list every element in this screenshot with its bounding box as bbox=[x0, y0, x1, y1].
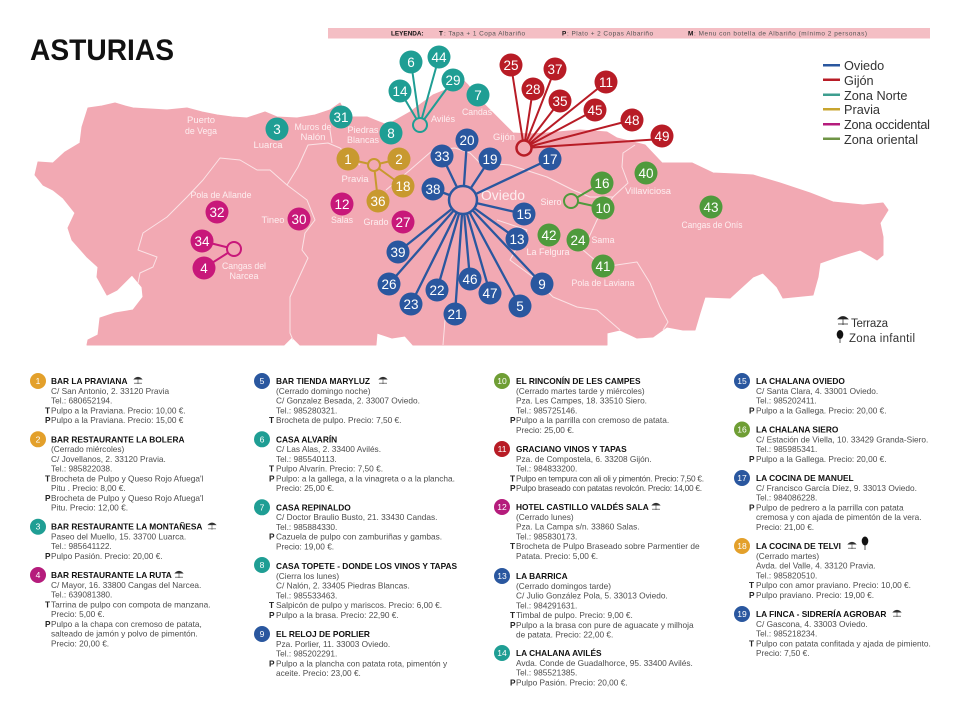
markers: Gijón bbox=[500, 54, 674, 156]
entry 2: (Cerrado miércoles) bbox=[51, 444, 125, 454]
place labels: Pravia bbox=[342, 174, 369, 185]
entry 8: Pulpo a la brasa. Precio: 22,90 €. bbox=[276, 610, 399, 620]
entry 1: BAR LA PRAVIANA bbox=[51, 376, 127, 386]
markers: Zona occidental bbox=[190, 192, 414, 280]
markers: Pravia: 36 bbox=[370, 194, 386, 209]
place labels: Nalón bbox=[300, 132, 326, 143]
place labels: Puerto bbox=[187, 115, 215, 126]
legend band: : Plato + 2 Copas Albariño bbox=[567, 31, 653, 38]
markers: Oviedo: 17 bbox=[542, 152, 558, 167]
zone legend: Gijón bbox=[844, 74, 874, 88]
entry 9: 9 bbox=[260, 629, 265, 639]
entry 13: T bbox=[510, 610, 515, 620]
entry 16: P bbox=[749, 454, 755, 464]
legend band: : Menu con botella de Albariño (mínimo 2 personas) bbox=[694, 31, 867, 38]
place labels: Narcea bbox=[230, 271, 259, 282]
entry 9: P bbox=[269, 658, 275, 668]
place labels bbox=[185, 107, 743, 289]
entry 17: Pulpo de pedrero a la parrilla con patata bbox=[756, 502, 904, 512]
entry 12: 12 bbox=[497, 502, 507, 512]
entry 16: LA CHALANA SIERO bbox=[756, 424, 839, 434]
zone legend: Pravia bbox=[844, 103, 881, 117]
entry 2: Brocheta de Pulpo y Queso Rojo Afuega'l bbox=[51, 473, 204, 483]
entry 10: EL RINCONÍN DE LES CAMPES bbox=[516, 375, 641, 386]
entry 18: T bbox=[749, 580, 754, 590]
entry 10: Pulpo a la parrilla con cremoso de patata. bbox=[516, 415, 669, 425]
entry 1: Pulpo a la Praviana. Precio: 15,00 € bbox=[51, 415, 184, 425]
entry 4: C/ Mayor, 16. 33800 Cangas del Narcea. bbox=[51, 580, 201, 590]
entry 8: Salpicón de pulpo y mariscos. Precio: 6,00 €. bbox=[276, 600, 442, 610]
legend band bbox=[328, 28, 930, 38]
entry 3: Paseo del Muello, 15. 33700 Luarca. bbox=[51, 532, 186, 542]
entry 15 bbox=[734, 373, 887, 415]
entry 18: Avda. del Valle, 4. 33120 Pravia. bbox=[756, 560, 876, 570]
entry 14: LA CHALANA AVILÉS bbox=[516, 647, 602, 658]
markers: Oviedo: 22 bbox=[429, 283, 445, 298]
entry 1: C/ San Antonio, 2. 33120 Pravia bbox=[51, 386, 169, 396]
entry 1 bbox=[30, 373, 186, 425]
entry 7 bbox=[254, 499, 442, 551]
entry 12: Patata. Precio: 5,00 €. bbox=[516, 551, 598, 561]
entry 10 bbox=[494, 373, 669, 435]
icon legend: Zona infantil bbox=[849, 333, 915, 345]
entry 3 bbox=[30, 519, 216, 561]
entry 2: Brocheta de Pulpo y Queso Rojo Afuega'l bbox=[51, 493, 204, 503]
entry 18: LA COCINA DE TELVI bbox=[756, 541, 841, 551]
markers: Oviedo: 15 bbox=[516, 207, 532, 222]
entry 9 bbox=[254, 626, 448, 678]
entry 19: T bbox=[749, 638, 754, 648]
place labels: Salas bbox=[331, 215, 353, 226]
entry 6: T bbox=[269, 464, 274, 474]
entry 11: Pulpo braseado con patatas revolcón. Precio: 14,00 €. bbox=[516, 483, 702, 493]
entry 12: HOTEL CASTILLO VALDÉS SALA bbox=[516, 501, 649, 512]
markers: Gijón: 11 bbox=[599, 75, 613, 90]
entry 12: Tel.: 985830173. bbox=[516, 531, 577, 541]
entry 4: Precio: 5,00 €. bbox=[51, 609, 105, 619]
entry 11: GRACIANO VINOS Y TAPAS bbox=[516, 444, 627, 454]
entry 17: Tel.: 984086228. bbox=[756, 492, 817, 502]
entry 17: P bbox=[749, 502, 755, 512]
legend band: M bbox=[688, 31, 693, 38]
map of Asturias bbox=[35, 80, 888, 345]
entry 9: Pza. Porlier, 11. 33003 Oviedo. bbox=[276, 639, 390, 649]
entry 13: 13 bbox=[497, 571, 507, 581]
entry 10: Pza. Les Campes, 18. 33510 Siero. bbox=[516, 396, 647, 406]
entry 2: Pitu . Precio: 8,00 €. bbox=[51, 483, 126, 493]
markers: Oviedo: 20 bbox=[459, 133, 475, 148]
entry 11: Pza. de Compostela, 6. 33208 Gijón. bbox=[516, 454, 652, 464]
markers: Zona occidental: 30 bbox=[291, 212, 307, 227]
entry 1: T bbox=[45, 405, 50, 415]
entry 8: C/ Nalón, 2. 33405 Piedras Blancas. bbox=[276, 580, 410, 590]
markers: Pravia bbox=[336, 148, 414, 212]
entry 8: Tel.: 985533463. bbox=[276, 590, 337, 600]
entry 14: Avda. Conde de Guadalhorce, 95. 33400 Avilés. bbox=[516, 658, 693, 668]
entry 11: Pulpo en tempura con ali oli y pimentón. Precio: 7,50 €. bbox=[516, 473, 704, 483]
entry 15: P bbox=[749, 405, 755, 415]
place labels: Sama bbox=[592, 235, 615, 246]
entry 14 bbox=[494, 645, 693, 687]
entry 18: Pulpo con amor praviano. Precio: 10,00 €. bbox=[756, 580, 911, 590]
entry 2: T bbox=[45, 473, 50, 483]
entry 3: Tel.: 985641122. bbox=[51, 541, 112, 551]
markers: Oviedo: 5 bbox=[516, 299, 524, 314]
entry 15: Pulpo a la Gallega. Precio: 20,00 €. bbox=[756, 405, 887, 415]
entry 11: 11 bbox=[498, 444, 507, 454]
entry 16 bbox=[734, 422, 928, 464]
entry 16: Tel.: 985985341. bbox=[756, 444, 817, 454]
entry 10: Precio: 25,00 €. bbox=[516, 425, 574, 435]
place labels: Pola de Laviana bbox=[572, 278, 635, 289]
markers: Oviedo: 47 bbox=[482, 286, 498, 301]
place labels: Siero bbox=[540, 197, 562, 208]
markers: Gijón: 25 bbox=[503, 58, 519, 73]
entry 5: T bbox=[269, 415, 274, 425]
markers: Zona Norte bbox=[266, 46, 490, 144]
entry 3: P bbox=[45, 551, 51, 561]
markers: Zona oriental: 40 bbox=[638, 166, 654, 181]
entry 8: T bbox=[269, 600, 274, 610]
entry 8 bbox=[254, 557, 458, 620]
entry 15: C/ Santa Clara, 4. 33001 Oviedo. bbox=[756, 386, 878, 396]
markers: Zona oriental: 43 bbox=[703, 200, 719, 215]
entry 19: Precio: 7,50 €. bbox=[756, 648, 810, 658]
markers: Pravia: 1 bbox=[344, 152, 352, 167]
place labels: Gijón bbox=[493, 132, 515, 143]
entry 1: 1 bbox=[36, 376, 41, 386]
entry 12: T bbox=[510, 541, 515, 551]
markers: Oviedo: 39 bbox=[390, 245, 406, 260]
entry 9: Tel.: 985202291. bbox=[276, 648, 337, 658]
entry 9: aceite. Precio: 23,00 €. bbox=[276, 668, 361, 678]
icon legend: Terraza bbox=[851, 318, 889, 330]
entry 11: Tel.: 984833200. bbox=[516, 464, 577, 474]
entry 14: Pulpo Pasión. Precio: 20,00 €. bbox=[516, 677, 628, 687]
entry 1: Tel.: 680652194. bbox=[51, 396, 112, 406]
markers: Zona Norte: 31 bbox=[333, 110, 349, 125]
place labels: Cangas del bbox=[222, 261, 266, 272]
markers: Zona oriental: 41 bbox=[595, 259, 611, 274]
entry 17 bbox=[734, 470, 922, 532]
entry 4: Pulpo a la chapa con cremoso de patata, bbox=[51, 619, 202, 629]
entry 10: Tel.: 985725146. bbox=[516, 405, 577, 415]
place labels: Luarca bbox=[254, 140, 283, 151]
entry 19: 19 bbox=[737, 609, 747, 619]
entry 18: 18 bbox=[737, 541, 747, 551]
place labels: Avilés bbox=[431, 114, 455, 125]
markers: Gijón: 48 bbox=[624, 113, 640, 128]
entry 14: P bbox=[510, 677, 516, 687]
entry 13: P bbox=[510, 620, 516, 630]
entry 11: T bbox=[510, 473, 515, 483]
entry 5: 5 bbox=[260, 376, 265, 386]
entry 19: C/ Gascona, 4. 33003 Oviedo. bbox=[756, 619, 868, 629]
markers: Oviedo: 38 bbox=[425, 182, 441, 197]
entry 4: T bbox=[45, 599, 50, 609]
entry 5 bbox=[254, 373, 420, 425]
markers: Zona oriental bbox=[538, 162, 722, 278]
place labels: Muros de bbox=[294, 122, 332, 133]
entry 17: C/ Francisco García Díez, 9. 33013 Oviedo. bbox=[756, 483, 917, 493]
entry 13 bbox=[494, 568, 694, 640]
place labels: Tineo bbox=[262, 215, 284, 226]
entry 9: Pulpo a la plancha con patata rota, pimentón y bbox=[276, 658, 448, 668]
markers: Zona Norte: 7 bbox=[474, 88, 482, 103]
markers: Zona oriental: 10 bbox=[595, 201, 611, 216]
entry 13: de patata. Precio: 22,00 €. bbox=[516, 630, 613, 640]
place labels: de Vega bbox=[185, 126, 218, 137]
entry 4: salteado de jamón y polvo de pimentón. bbox=[51, 629, 198, 639]
zone legend: Oviedo bbox=[844, 59, 884, 73]
entry 15: 15 bbox=[737, 376, 747, 386]
entry 15: Tel.: 985202411. bbox=[756, 396, 817, 406]
entry 12 bbox=[494, 499, 700, 561]
zone legend: Zona oriental bbox=[844, 133, 918, 147]
entry 11: P bbox=[510, 483, 516, 493]
entry 14: 14 bbox=[497, 648, 507, 658]
zone legend: Zona occidental bbox=[844, 118, 930, 132]
markers: Oviedo: 9 bbox=[538, 277, 546, 292]
markers: Gijón: 45 bbox=[587, 103, 603, 118]
entry 2: C/ Jovellanos, 2. 33120 Pravia. bbox=[51, 454, 166, 464]
markers: Zona oriental: 16 bbox=[594, 176, 610, 191]
entry 5: Tel.: 985280321. bbox=[276, 405, 337, 415]
markers: Gijón: 49 bbox=[654, 129, 670, 144]
zone legend: Zona Norte bbox=[844, 89, 907, 103]
markers: Zona occidental: 34 bbox=[194, 234, 210, 249]
place labels: La Felgura bbox=[526, 247, 570, 258]
entry 8: CASA TOPETE - DONDE LOS VINOS Y TAPAS bbox=[276, 561, 458, 571]
icon legend bbox=[837, 316, 915, 345]
entry 7: CASA REPINALDO bbox=[276, 502, 351, 512]
entry 10: P bbox=[510, 415, 516, 425]
entry 13: Pulpo a la brasa con pure de aguacate y milhoja bbox=[516, 620, 694, 630]
entry 6: P bbox=[269, 473, 275, 483]
entry 13: C/ Julio González Pola, 5. 33013 Oviedo. bbox=[516, 590, 668, 600]
entry 16: C/ Estación de Viella, 10. 33429 Granda-Siero. bbox=[756, 434, 928, 444]
entry 19 bbox=[734, 606, 931, 658]
entry 4 bbox=[30, 567, 211, 648]
entry 8: (Cierra los lunes) bbox=[276, 571, 339, 581]
entry 18: Pulpo praviano. Precio: 19,00 €. bbox=[756, 590, 874, 600]
entry 4: Tel.: 639081380. bbox=[51, 590, 112, 600]
legend band: P bbox=[562, 31, 567, 38]
title: ASTURIAS bbox=[30, 34, 174, 67]
markers: Zona Norte: 44 bbox=[431, 50, 447, 65]
entry 4: Precio: 20,00 €. bbox=[51, 638, 109, 648]
entry 15: LA CHALANA OVIEDO bbox=[756, 376, 845, 386]
legend band: LEYENDA: bbox=[391, 31, 424, 38]
markers: Zona occidental: 32 bbox=[209, 205, 225, 220]
entry 5: (Cerrado domingo noche) bbox=[276, 386, 371, 396]
entry 7: 7 bbox=[260, 502, 265, 512]
entry 6: C/ Las Alas, 2. 33400 Avilés. bbox=[276, 444, 381, 454]
markers: Zona Norte: 14 bbox=[392, 84, 408, 99]
entry 7: Tel.: 985884330. bbox=[276, 522, 337, 532]
markers: Pravia: 2 bbox=[395, 152, 403, 167]
entry 8: 8 bbox=[260, 560, 265, 570]
entry 17: 17 bbox=[737, 473, 747, 483]
markers: Oviedo: 26 bbox=[381, 277, 397, 292]
entry 5: BAR TIENDA MARYLUZ bbox=[276, 376, 370, 386]
markers: Oviedo: 23 bbox=[403, 297, 419, 312]
entry 18 bbox=[734, 536, 911, 600]
entry 13: LA BARRICA bbox=[516, 571, 568, 581]
zone legend bbox=[823, 59, 930, 147]
entry 6: CASA ALVARÍN bbox=[276, 433, 337, 444]
markers: Oviedo: 21 bbox=[447, 307, 463, 322]
legend band: T bbox=[439, 31, 443, 38]
entry 13: Tel.: 984291631. bbox=[516, 600, 577, 610]
entry 6 bbox=[254, 431, 455, 493]
entry 7: P bbox=[269, 532, 275, 542]
entry 12: Pza. La Campa s/n. 33860 Salas. bbox=[516, 522, 640, 532]
entry 2: Tel.: 985822038. bbox=[51, 464, 112, 474]
entry 2: Pitu. Precio: 12,00 €. bbox=[51, 503, 128, 513]
entry 7: C/ Doctor Braulio Busto, 21. 33430 Candas. bbox=[276, 512, 437, 522]
entry 13: (Cerrado domingos tarde) bbox=[516, 581, 611, 591]
markers: Pravia: 18 bbox=[395, 179, 411, 194]
markers: Oviedo: 13 bbox=[509, 232, 525, 247]
entry 5: C/ Gonzalez Besada, 2. 33007 Oviedo. bbox=[276, 396, 420, 406]
entry 14: Tel.: 985521385. bbox=[516, 668, 577, 678]
entry 4: 4 bbox=[36, 570, 41, 580]
entry 6: Precio: 25,00 €. bbox=[276, 483, 334, 493]
entry 10: 10 bbox=[497, 376, 507, 386]
markers: Gijón: 35 bbox=[552, 94, 568, 109]
entry 1: Pulpo a la Praviana. Precio: 10,00 €. bbox=[51, 405, 186, 415]
entry 2: P bbox=[45, 493, 51, 503]
entry 9: EL RELOJ DE PORLIER bbox=[276, 629, 370, 639]
entry 2: 2 bbox=[36, 434, 41, 444]
place labels: Candas bbox=[462, 107, 492, 118]
entry 16: Pulpo a la Gallega. Precio: 20,00 €. bbox=[756, 454, 887, 464]
entry 11 bbox=[494, 441, 704, 493]
entry 6: Pulpo: a la gallega, a la vinagreta o a la plancha. bbox=[276, 473, 455, 483]
markers: Zona occidental: 12 bbox=[334, 197, 350, 212]
legend band: : Tapa + 1 Copa Albariño bbox=[444, 31, 525, 38]
place labels: Oviedo bbox=[481, 187, 525, 203]
entry 3: Pulpo Pasión. Precio: 20,00 €. bbox=[51, 551, 163, 561]
entry 18: (Cerrado martes) bbox=[756, 551, 819, 561]
entry 17: LA COCINA DE MANUEL bbox=[756, 473, 854, 483]
entry 3: BAR RESTAURANTE LA MONTAÑESA bbox=[51, 522, 202, 532]
entry 19: LA FINCA - SIDRERÍA AGROBAR bbox=[756, 608, 886, 619]
markers: Gijón: 37 bbox=[547, 62, 563, 77]
markers: Zona Norte: 6 bbox=[407, 55, 415, 70]
markers: Zona oriental: 24 bbox=[570, 233, 586, 248]
entry 8: P bbox=[269, 610, 275, 620]
entry 12: Brocheta de Pulpo Braseado sobre Parmentier de bbox=[516, 541, 700, 551]
entry 7: Cazuela de pulpo con zamburiñas y gambas. bbox=[276, 532, 442, 542]
entry 17: cremosa y con ajada de pimentón de la vera. bbox=[756, 512, 922, 522]
place labels: Piedras bbox=[348, 125, 379, 136]
entry 6: Pulpo Alvarín. Precio: 7,50 €. bbox=[276, 464, 383, 474]
markers: Oviedo: 46 bbox=[462, 272, 478, 287]
entry 4: Tarrina de pulpo con compota de manzana. bbox=[51, 599, 211, 609]
place labels: Blancas bbox=[347, 135, 379, 146]
place labels: Villaviciosa bbox=[625, 186, 672, 197]
entry 19: Tel.: 985218234. bbox=[756, 628, 817, 638]
markers: Gijón: 28 bbox=[525, 82, 541, 97]
entry 3: 3 bbox=[36, 522, 41, 532]
entry 10: (Cerrado martes tarde y miércoles) bbox=[516, 386, 645, 396]
entry 16: 16 bbox=[737, 424, 747, 434]
entry 2 bbox=[30, 431, 204, 513]
markers: Zona Norte: 3 bbox=[273, 122, 281, 137]
entry 5: Brocheta de pulpo. Precio: 7,50 €. bbox=[276, 415, 401, 425]
entry 6: 6 bbox=[260, 434, 265, 444]
entry 17: Precio: 21,00 €. bbox=[756, 522, 814, 532]
entry 7: Precio: 19,00 €. bbox=[276, 541, 334, 551]
entry 4: P bbox=[45, 619, 51, 629]
entry 18: P bbox=[749, 590, 755, 600]
place labels: Grado bbox=[364, 217, 388, 228]
markers: Zona occidental: 27 bbox=[395, 215, 411, 230]
place labels: Cangas de Onís bbox=[682, 220, 743, 231]
entry 1: P bbox=[45, 415, 51, 425]
markers: Oviedo bbox=[378, 128, 562, 326]
markers: Oviedo: 33 bbox=[434, 149, 450, 164]
entry 18: Tel.: 985820510. bbox=[756, 570, 817, 580]
markers: Zona Norte: 8 bbox=[387, 126, 395, 141]
entry 4: BAR RESTAURANTE LA RUTA bbox=[51, 570, 172, 580]
entry 13: Timbal de pulpo. Precio: 9,00 €. bbox=[516, 610, 633, 620]
markers: Zona Norte: 29 bbox=[445, 73, 461, 88]
entry 12: (Cerrado lunes) bbox=[516, 512, 574, 522]
markers: Oviedo: 19 bbox=[482, 152, 498, 167]
markers: Zona oriental: 42 bbox=[541, 228, 557, 243]
entry 6: Tel.: 985540113. bbox=[276, 454, 337, 464]
markers: Zona occidental: 4 bbox=[200, 261, 208, 276]
place labels: Pola de Allande bbox=[190, 190, 252, 201]
entry 2: BAR RESTAURANTE LA BOLERA bbox=[51, 434, 184, 444]
entry 19: Pulpo con patata confitada y ajada de pimiento. bbox=[756, 638, 931, 648]
